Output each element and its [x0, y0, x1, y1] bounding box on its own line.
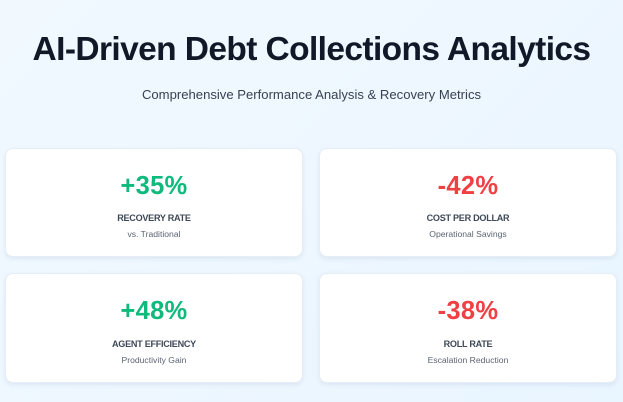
metric label: cost per dollar: COST PER DOLLAR	[427, 213, 509, 223]
metric value: +48%: +48%	[120, 297, 188, 325]
metric label: agent efficiency: AGENT EFFICIENCY	[112, 339, 196, 349]
metric note: escalation reduction: Escalation Reduction	[428, 355, 508, 365]
panel: agent efficiency	[5, 273, 303, 383]
metric label: roll rate: ROLL RATE	[444, 339, 492, 349]
metric note: vs. traditional: vs. Traditional	[127, 229, 180, 239]
title: AI-Driven Debt Collections Analytics	[33, 31, 590, 68]
metric value: +35%: +35%	[120, 172, 188, 200]
panel: recovery rate	[5, 148, 303, 257]
panel: roll rate	[319, 273, 617, 383]
panel: cost per dollar	[319, 148, 617, 257]
metric note: productivity gain: Productivity Gain	[122, 355, 186, 365]
subtitle: Comprehensive Performance Analysis & Recovery Metrics	[142, 87, 481, 102]
metric note: operational savings: Operational Savings	[429, 229, 507, 239]
metric value: -42%: -42%	[438, 172, 498, 200]
metric value: -38%: -38%	[438, 297, 498, 325]
metric label: recovery rate: RECOVERY RATE	[117, 213, 191, 223]
